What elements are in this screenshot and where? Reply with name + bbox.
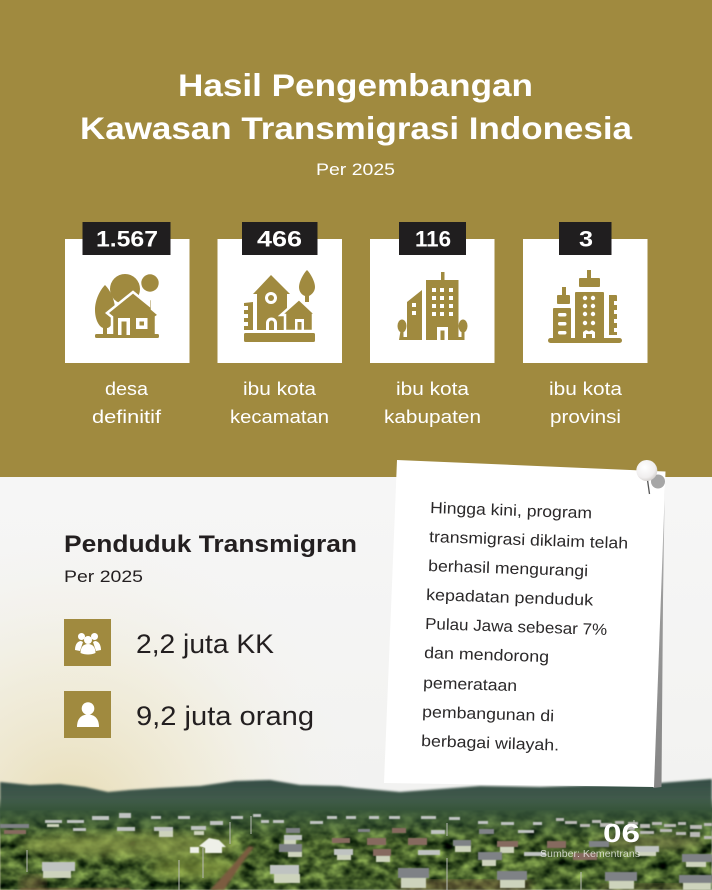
number badge: 116 (415, 226, 451, 252)
note text (421, 500, 628, 755)
note text: transmigrasi diklaim telah (429, 529, 628, 553)
note text: pemerataan (423, 675, 517, 695)
top olive header band (0, 0, 712, 477)
label (230, 378, 329, 427)
value: 2,2 juta KK (136, 629, 274, 659)
note paper (384, 460, 666, 787)
house bodies (43, 824, 711, 890)
label: ibu kota (549, 378, 623, 399)
note text: berbagai wilayah. (421, 733, 559, 755)
note text: Pulau Jawa sebesar 7% (425, 616, 607, 639)
vegetation texture (0, 810, 712, 890)
icon: family group (64, 619, 111, 666)
label: ibu kota (396, 378, 470, 399)
icon: city towers (548, 270, 622, 343)
stat row: orang (64, 691, 314, 738)
stat card: ibu kota kabupaten (370, 222, 494, 427)
lower background (0, 477, 712, 890)
number badge (559, 222, 612, 255)
number badge: 466 (257, 226, 302, 252)
page number: 06 (603, 818, 640, 848)
sunlit fields (20, 833, 705, 878)
note text: berhasil mengurangi (428, 558, 588, 580)
stat card: ibu kota kecamatan (218, 222, 342, 427)
subtitle: Per 2025 (316, 160, 395, 179)
number badge: 3 (579, 226, 593, 252)
icon: district houses (244, 270, 316, 342)
stat card: ibu kota provinsi (523, 222, 648, 427)
distant forest shade (0, 798, 712, 842)
houses (0, 813, 712, 890)
value: 9,2 juta orang (136, 701, 314, 731)
hills (0, 779, 712, 830)
stat card: desa definitif (65, 222, 190, 427)
note text: pembangunan di (422, 704, 554, 725)
brown roofs (4, 828, 597, 860)
electricity poles (27, 816, 634, 890)
label: provinsi (550, 406, 621, 427)
light roofs (42, 813, 659, 874)
label: desa (105, 378, 149, 399)
label (92, 378, 162, 427)
icon: office buildings (398, 272, 468, 340)
label: definitif (92, 406, 162, 427)
icon: person (64, 691, 111, 738)
source note: Sumber: Kementrans (540, 848, 640, 860)
label: kabupaten (384, 406, 481, 427)
note edge shadow (653, 472, 665, 788)
section subtitle: Per 2025 (64, 567, 143, 586)
icon: village house (95, 274, 159, 338)
number badge (242, 222, 318, 255)
number badge (399, 222, 466, 255)
icon: push pin (636, 460, 665, 494)
town on the right (556, 818, 712, 839)
note text: kepadatan penduduk (426, 587, 594, 610)
title: Hasil Pengembangan (178, 67, 533, 103)
label: ibu kota (243, 378, 317, 399)
title (80, 67, 633, 146)
note text: dan mendorong (424, 645, 549, 666)
label (384, 378, 481, 427)
title: Kawasan Transmigrasi Indonesia (80, 110, 633, 146)
section heading: Penduduk Transmigran: Penduduk Transmigran (64, 531, 357, 558)
photo: transmigration village landscape (0, 779, 712, 890)
label: kecamatan (230, 406, 329, 427)
stat row: KK (64, 619, 274, 666)
note text: Hingga kini, program (430, 500, 592, 522)
white house (190, 838, 226, 853)
sticky note (384, 460, 666, 788)
number badge: 1.567 (96, 226, 158, 252)
label (549, 378, 623, 427)
dirt roads (20, 846, 700, 890)
dark roofs (0, 824, 712, 883)
number badge (82, 222, 170, 255)
